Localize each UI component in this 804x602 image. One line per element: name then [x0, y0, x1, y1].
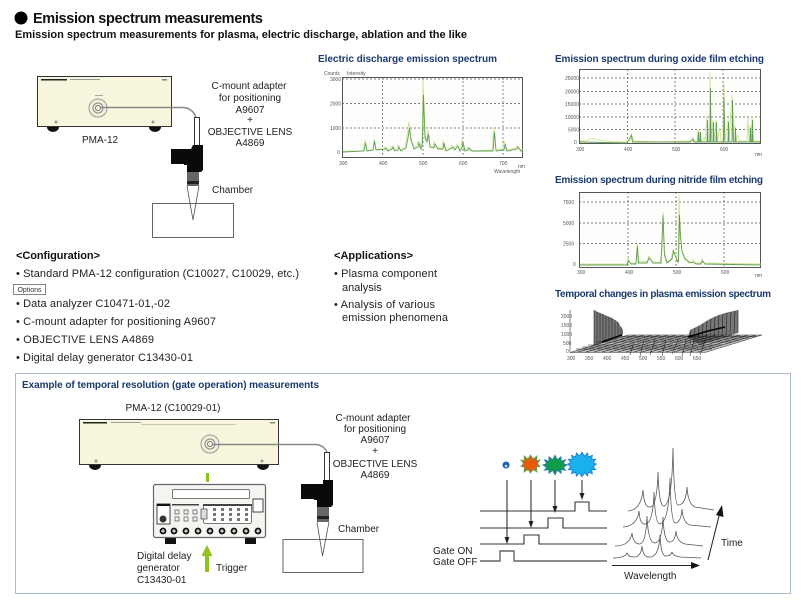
icon: PMA-12 device	[38, 76, 172, 132]
chamber	[152, 186, 234, 238]
label: adapter and lens: +	[247, 115, 253, 126]
chart: nitride film etching spectrum: 600	[721, 270, 730, 276]
chart: temporal changes 3D waterfall: 2000	[561, 314, 572, 320]
options tag: Options	[17, 287, 42, 294]
list item: objective lens: • OBJECTIVE LENS A4869	[16, 334, 154, 346]
label: gate off: Gate OFF	[433, 557, 477, 568]
label: adapter and lens: for positioning	[344, 424, 406, 435]
label: adapter and lens: A9607	[361, 435, 390, 446]
chart: oxide film etching spectrum: 0	[574, 140, 577, 146]
list item: plasma: analysis	[342, 282, 382, 294]
label: adapter and lens: for positioning	[219, 93, 281, 104]
heading: electric discharge chart: Electric discharge emission spectrum	[318, 54, 497, 65]
chart: temporal changes 3D waterfall: 0	[566, 349, 569, 355]
label: adapter and lens: C-mount adapter	[211, 81, 287, 92]
list item: C-mount adapter: • C-mount adapter for positioning A9607	[16, 316, 216, 328]
label: digital delay generator: Digital delay	[137, 551, 191, 562]
chart: temporal changes 3D waterfall: 500	[639, 356, 648, 362]
heading: applications: <Applications>	[334, 250, 413, 262]
chart: electric discharge emission spectrum: Intensity	[347, 71, 366, 77]
chart: nitride film etching spectrum: 0	[573, 262, 576, 268]
chart: electric discharge emission spectrum: Wavelength	[494, 169, 520, 175]
label: time: Time	[721, 538, 743, 549]
label: adapter and lens: OBJECTIVE LENS	[333, 459, 418, 470]
icon: objective lens and adapter	[301, 452, 333, 522]
chart: nitride film etching spectrum: 400	[625, 270, 634, 276]
chart: oxide film etching spectrum: 20000	[565, 90, 579, 96]
label: adapter and lens	[208, 81, 293, 149]
list item: standard: • Standard PMA-12 configuration (C10027, C10029, etc.)	[16, 268, 299, 280]
label: digital delay generator: generator	[137, 563, 180, 574]
chart: nitride film etching spectrum	[563, 192, 762, 279]
subtitle: Emission spectrum measurements for plasma, electric discharge, ablation and the like	[15, 29, 467, 41]
label: gate on: Gate ON	[433, 546, 472, 557]
list item: phenomena: • Analysis of various	[334, 299, 436, 311]
label: digital delay generator	[137, 551, 191, 586]
arrow: wavelength	[612, 564, 693, 566]
label: adapter and lens: C-mount adapter	[335, 413, 411, 424]
heading: temporal changes chart: Temporal changes in plasma emission spectrum	[555, 289, 771, 300]
chart: temporal changes 3D waterfall: 500	[563, 341, 572, 347]
icon: objective lens and adapter	[171, 118, 203, 186]
chart: oxide film etching spectrum: 5000	[568, 128, 579, 134]
cable	[100, 108, 196, 117]
chamber	[283, 522, 363, 572]
heading: example: Example of temporal resolution (gate operation) measurements	[22, 380, 319, 391]
chart: electric discharge emission spectrum: 500	[419, 161, 428, 167]
panel: temporal resolution example	[16, 374, 790, 594]
chart: temporal changes 3D waterfall: 400	[603, 356, 612, 362]
connector: green link	[206, 473, 209, 482]
chart: temporal changes 3D waterfall: 650	[693, 356, 702, 362]
arrows: burst to gate	[504, 480, 584, 544]
label: adapter and lens: A4869	[361, 470, 390, 481]
chart: electric discharge emission spectrum: 2000	[330, 102, 341, 108]
chart: oxide film etching spectrum: 500	[672, 147, 681, 153]
chart: temporal changes 3D waterfall: 450	[621, 356, 630, 362]
chart: oxide film etching spectrum: 600	[720, 147, 729, 153]
arrow: time	[708, 512, 720, 560]
arrow: trigger	[202, 545, 212, 572]
list item: phenomena	[334, 299, 449, 324]
chart: electric discharge emission spectrum: 700	[499, 161, 508, 167]
cable	[212, 444, 327, 452]
chart: electric discharge emission spectrum: 600	[459, 161, 468, 167]
chart: temporal changes 3D waterfall: 1000	[561, 332, 572, 338]
label: adapter and lens: +	[372, 446, 378, 457]
chart: temporal changes 3D waterfall: 1500	[561, 323, 572, 329]
arrowhead: time	[716, 505, 724, 517]
chart: nitride film etching spectrum: 2500	[563, 242, 574, 248]
label: adapter and lens: OBJECTIVE LENS	[208, 127, 293, 138]
icon: emission bursts	[502, 452, 596, 477]
chart: oxide film etching spectrum: 300	[576, 147, 585, 153]
label: chamber: Chamber	[338, 524, 380, 535]
panel: applications	[334, 250, 449, 324]
chart: gate timing lines	[480, 502, 607, 561]
chart: temporal changes 3D waterfall: 300	[567, 356, 576, 362]
chart: electric discharge emission spectrum: 0	[337, 150, 340, 156]
chart: time-resolved spectra	[613, 448, 714, 558]
chart: oxide film etching spectrum: 25000	[565, 76, 579, 82]
label: adapter and lens: A9607	[236, 105, 265, 116]
label: PMA-12 (C10029-01): PMA-12 (C10029-01)	[125, 403, 221, 414]
chart: nitride film etching spectrum: 7500	[563, 200, 574, 206]
chart: nitride film etching spectrum: nm	[755, 273, 762, 279]
chart: electric discharge emission spectrum: 400	[379, 161, 388, 167]
icon: digital delay generator	[154, 484, 266, 544]
chart: electric discharge emission spectrum: Counts	[324, 71, 340, 77]
panel: configuration	[14, 250, 299, 364]
chart: nitride film etching spectrum: 500	[673, 270, 682, 276]
heading: configuration: <Configuration>	[16, 250, 100, 262]
title: Emission spectrum measurements	[33, 11, 263, 27]
label: PMA-12: PMA-12	[82, 135, 118, 146]
chart: oxide film etching spectrum: 10000	[565, 115, 579, 121]
list item: phenomena: emission phenomena	[342, 312, 449, 324]
label: adapter and lens	[333, 413, 418, 481]
chart: temporal changes 3D waterfall: 350	[585, 356, 594, 362]
list item: plasma	[334, 268, 437, 294]
chart: nitride film etching spectrum: 5000	[563, 221, 574, 227]
chart: electric discharge emission spectrum: 300	[339, 161, 348, 167]
heading: oxide film chart: Emission spectrum during oxide film etching	[555, 54, 764, 65]
label: chamber: Chamber	[212, 185, 254, 196]
arrowhead: wavelength	[691, 562, 700, 569]
chart: electric discharge emission spectrum: 1000	[330, 126, 341, 132]
label: adapter and lens: A4869	[236, 138, 265, 149]
chart: oxide film etching spectrum: 15000	[565, 102, 579, 108]
chart: oxide film etching spectrum: nm	[755, 152, 762, 158]
chart: oxide film etching spectrum	[565, 69, 762, 158]
chart: oxide film etching spectrum: 400	[624, 147, 633, 153]
label: wavelength: Wavelength	[624, 571, 676, 582]
label: trigger: Trigger	[216, 563, 248, 574]
chart: temporal changes 3D waterfall: 600	[675, 356, 684, 362]
list item: data analyzer: • Data analyzer C10471-01,-02	[16, 298, 170, 310]
chart: nitride film etching spectrum: 300	[577, 270, 586, 276]
icon: PMA-12 device	[80, 420, 278, 470]
options tag	[14, 284, 46, 294]
chart: temporal changes 3D waterfall: 550	[657, 356, 666, 362]
chart: electric discharge emission spectrum: 3000	[330, 77, 341, 83]
heading: nitride film chart: Emission spectrum during nitride film etching	[555, 175, 763, 186]
chart: electric discharge emission spectrum: nm	[518, 164, 525, 170]
list item: delay generator: • Digital delay generator C13430-01	[16, 352, 193, 364]
chart: electric discharge emission spectrum	[324, 71, 525, 175]
label: digital delay generator: C13430-01	[137, 575, 187, 586]
diagram: PMA-12 setup	[38, 76, 293, 238]
list item: plasma: • Plasma component	[334, 268, 437, 280]
chart: temporal changes 3D waterfall	[561, 310, 762, 362]
